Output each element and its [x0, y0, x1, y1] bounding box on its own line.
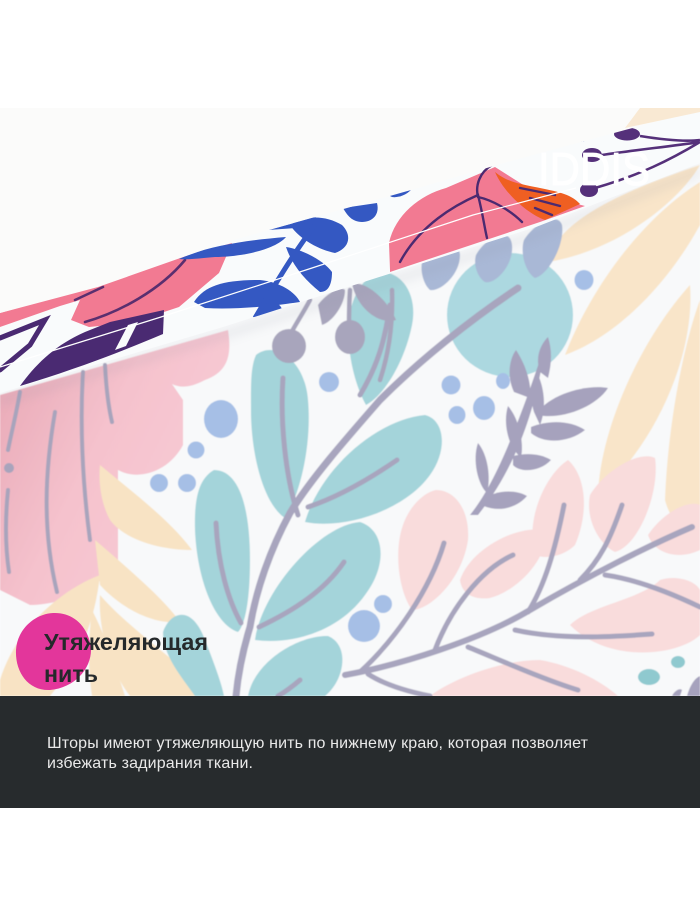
heading: Утяжеляющая: [44, 629, 208, 655]
caption text: [47, 735, 589, 772]
hem: dark purple band: [20, 310, 164, 386]
caption panel: [0, 696, 700, 808]
printed curtain fabric: [0, 150, 700, 696]
pale pink leaves, lower right: [398, 456, 700, 696]
folded hem: [0, 128, 700, 386]
heading: нить: [44, 661, 98, 687]
flower stripes: [6, 365, 112, 592]
blue dots: [150, 270, 594, 642]
caption text: избежать задирания ткани.: [47, 755, 253, 772]
hem: pink flower right: [389, 167, 585, 272]
pink flower, left: [0, 330, 229, 605]
hem: blue sprig: [179, 190, 411, 322]
stitching thread: [0, 188, 576, 367]
main lavender stems: [216, 288, 700, 696]
sprig with berries at fold: [272, 283, 396, 363]
teal leaves: [163, 272, 442, 696]
infographic canvas: [0, 108, 700, 808]
brand logo: IDDIS: [538, 143, 650, 195]
photo: curtain fabric with fold: [0, 100, 700, 696]
teal circle with blue-grey leaves: [447, 253, 573, 377]
heading: [44, 629, 208, 687]
shadow under fold: [0, 166, 700, 406]
hem: pink flower left: [0, 243, 232, 327]
hem: orange petal: [495, 172, 580, 220]
peach palm leaves, right: [552, 165, 700, 513]
lavender sprig, centre-right: [470, 337, 608, 515]
pink accent blob: [16, 613, 91, 690]
backdrop above the fold: [0, 108, 700, 408]
peach tip, top right corner: [625, 108, 700, 128]
peach leaves, lower-left: [0, 465, 212, 696]
hem: berries, top right: [580, 128, 640, 197]
caption text: Шторы имеют утяжеляющую нить по нижнему краю, которая позволяет: [47, 735, 589, 752]
